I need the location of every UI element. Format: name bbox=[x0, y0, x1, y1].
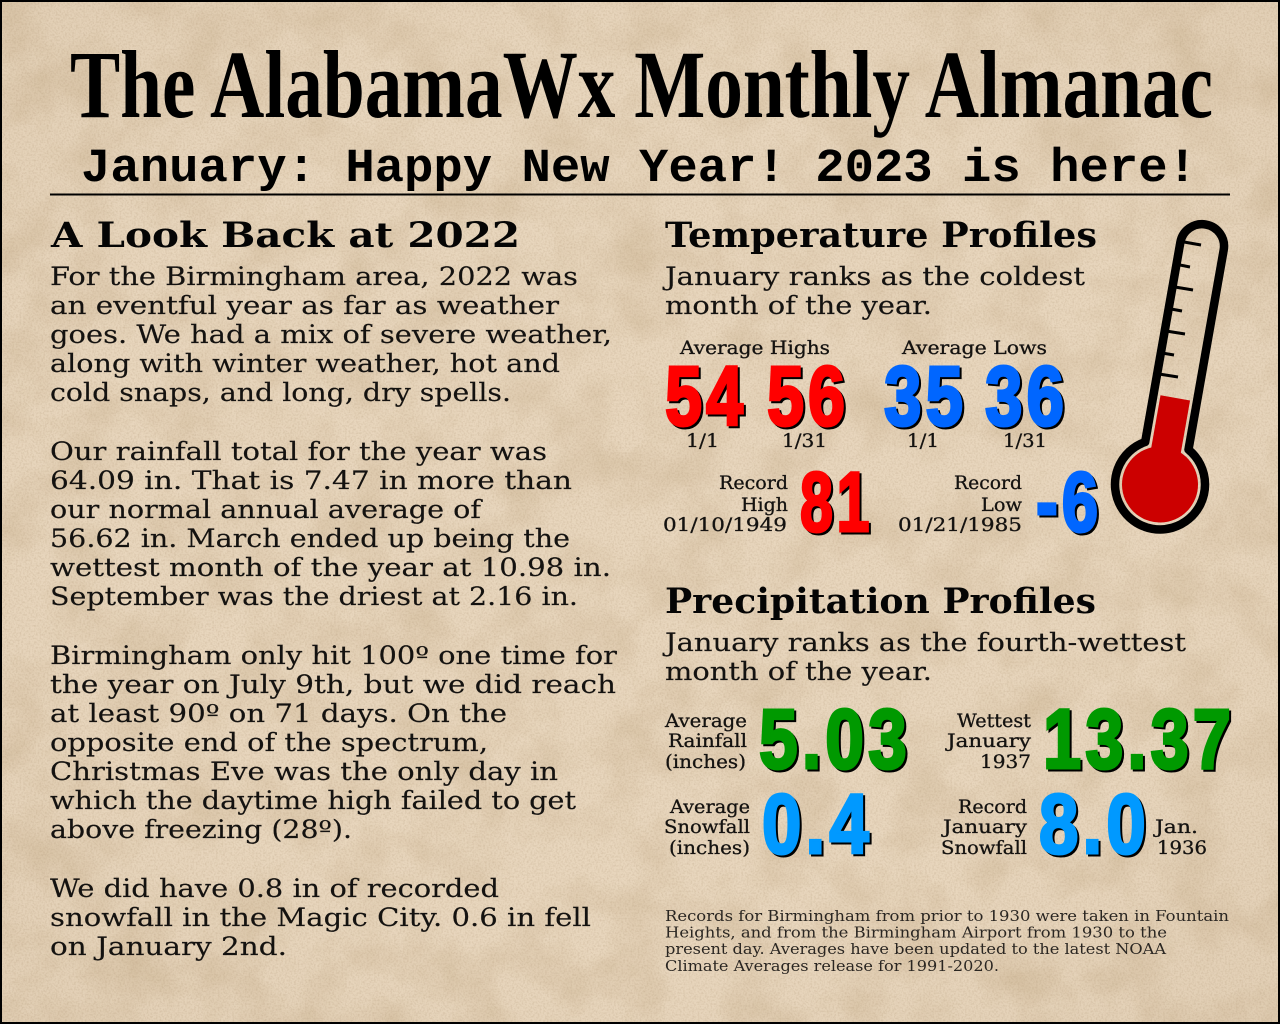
record january snowfall: 1936 bbox=[1157, 838, 1207, 859]
average snowfall: 0.4 bbox=[762, 777, 873, 871]
text block: temperature paragraph: Christmas Eve was the only day in bbox=[50, 757, 558, 786]
text block: rainfall paragraph bbox=[50, 437, 611, 611]
text block: precipitation intro: January ranks as the fourth-wettest bbox=[662, 628, 1186, 657]
average rainfall: Rainfall bbox=[668, 731, 747, 752]
average lows: label, values and dates: 35 bbox=[884, 349, 967, 443]
average snowfall: Average bbox=[669, 797, 750, 818]
icon: thermometer bbox=[1108, 217, 1250, 537]
text block: temperature paragraph: the year on July 9th, but we did reach bbox=[50, 670, 616, 699]
text block: snowfall paragraph bbox=[50, 874, 591, 961]
panel: a look back at 2022 bbox=[50, 215, 617, 961]
text block: snowfall paragraph: We did have 0.8 in of recorded bbox=[50, 874, 499, 903]
average snowfall: Snowfall bbox=[664, 817, 750, 838]
text block: temperature intro: January ranks as the coldest bbox=[662, 262, 1085, 291]
text block: overview paragraph: an eventful year as far as weather bbox=[50, 291, 559, 320]
text block: temperature paragraph bbox=[50, 641, 617, 844]
text block: overview paragraph: goes. We had a mix of severe weather, bbox=[50, 320, 612, 349]
wettest january: 1937 bbox=[980, 752, 1031, 773]
average lows: label, values and dates: 1/1 bbox=[907, 431, 939, 452]
heading: temperature profiles: Temperature Profiles bbox=[665, 215, 1097, 256]
average lows: label, values and dates: 1/31 bbox=[1003, 431, 1047, 452]
text block: temperature paragraph: at least 90º on 71 days. On the bbox=[50, 699, 507, 728]
average highs: label, values and dates: 1/1 bbox=[686, 431, 719, 452]
average lows: label, values and dates: Average Lows bbox=[901, 338, 1047, 359]
panel: temperature profiles bbox=[662, 215, 1250, 549]
text block: temperature paragraph: Birmingham only hit 100º one time for bbox=[50, 641, 617, 670]
text block: snowfall paragraph: snowfall in the Magic City. 0.6 in fell bbox=[50, 903, 591, 932]
text block: records footnote bbox=[665, 909, 1229, 975]
wettest january: Wettest bbox=[957, 711, 1032, 732]
average rainfall: (inches) bbox=[665, 752, 746, 773]
record high bbox=[663, 455, 873, 549]
text block: rainfall paragraph: our normal annual average of bbox=[50, 495, 483, 524]
average lows: label, values and dates bbox=[884, 338, 1068, 452]
text block: precipitation intro: month of the year. bbox=[665, 657, 932, 686]
record january snowfall: Record bbox=[958, 797, 1027, 818]
panel: precipitation profiles bbox=[662, 581, 1235, 975]
text block: rainfall paragraph: Our rainfall total for the year was bbox=[50, 437, 547, 466]
subtitle: January: Happy New Year! 2023 is here! bbox=[81, 143, 1197, 196]
text block: snowfall paragraph: on January 2nd. bbox=[50, 932, 287, 961]
text block: temperature intro bbox=[662, 262, 1085, 320]
text block: temperature paragraph: above freezing (28º). bbox=[50, 815, 352, 844]
wettest january: January bbox=[945, 731, 1032, 752]
record january snowfall: 8.0 bbox=[1039, 777, 1150, 871]
record low: Record bbox=[954, 473, 1022, 494]
record low: -6 bbox=[1036, 455, 1102, 549]
record january snowfall: Snowfall bbox=[941, 838, 1027, 859]
text block: rainfall paragraph: 56.62 in. March ended up being the bbox=[50, 524, 570, 553]
text block: overview paragraph: cold snaps, and long, dry spells. bbox=[50, 378, 511, 407]
average rainfall bbox=[664, 692, 911, 786]
average lows: label, values and dates: 36 bbox=[985, 349, 1068, 443]
text block: rainfall paragraph: September was the driest at 2.16 in. bbox=[50, 582, 578, 611]
record low: Low bbox=[981, 495, 1022, 516]
average highs: label, values and dates: 1/31 bbox=[782, 431, 827, 452]
wettest january: 13.37 bbox=[1043, 692, 1235, 786]
text block: precipitation intro bbox=[662, 628, 1186, 686]
average highs: label, values and dates: 54 bbox=[665, 349, 747, 443]
wettest january bbox=[945, 692, 1235, 786]
text block: overview paragraph: For the Birmingham area, 2022 was bbox=[50, 262, 578, 291]
record high: High bbox=[741, 495, 788, 516]
average highs: label, values and dates: Average Highs bbox=[679, 338, 830, 359]
average snowfall bbox=[664, 777, 873, 871]
text block: records footnote: Records for Birmingham from prior to 1930 were taken in Fountain bbox=[665, 909, 1229, 925]
record january snowfall: January bbox=[941, 817, 1028, 838]
text block: overview paragraph: along with winter weather, hot and bbox=[50, 349, 560, 378]
average snowfall: (inches) bbox=[669, 838, 750, 859]
text block: rainfall paragraph: wettest month of the year at 10.98 in. bbox=[50, 553, 611, 582]
text block: rainfall paragraph: 64.09 in. That is 7.47 in more than bbox=[50, 466, 572, 495]
text block: temperature paragraph: opposite end of the spectrum, bbox=[50, 728, 488, 757]
text block: temperature intro: month of the year. bbox=[665, 291, 932, 320]
record high: Record bbox=[719, 473, 788, 494]
heading: precipitation profiles: Precipitation Profiles bbox=[665, 581, 1096, 622]
average rainfall: 5.03 bbox=[759, 692, 911, 786]
record low: 01/21/1985 bbox=[898, 515, 1022, 536]
text block: temperature paragraph: which the daytime high failed to get bbox=[50, 786, 576, 815]
average rainfall: Average bbox=[664, 711, 747, 732]
heading: a look back at 2022: A Look Back at 2022 bbox=[50, 215, 520, 256]
text block: overview paragraph bbox=[50, 262, 612, 407]
text block: records footnote: Heights, and from the Birmingham Airport from 1930 to the bbox=[665, 926, 1167, 942]
record january snowfall: Jan. bbox=[1153, 817, 1198, 838]
record high: 01/10/1949 bbox=[663, 515, 787, 536]
record high: 81 bbox=[800, 455, 873, 549]
text block: records footnote: present day. Averages have been updated to the latest NOAA bbox=[665, 942, 1167, 958]
average highs: label, values and dates bbox=[665, 338, 849, 452]
record low bbox=[898, 455, 1102, 549]
average highs: label, values and dates: 56 bbox=[767, 349, 849, 443]
record january snowfall bbox=[941, 777, 1207, 871]
text block: records footnote: Climate Averages release for 1991-2020. bbox=[665, 959, 999, 975]
